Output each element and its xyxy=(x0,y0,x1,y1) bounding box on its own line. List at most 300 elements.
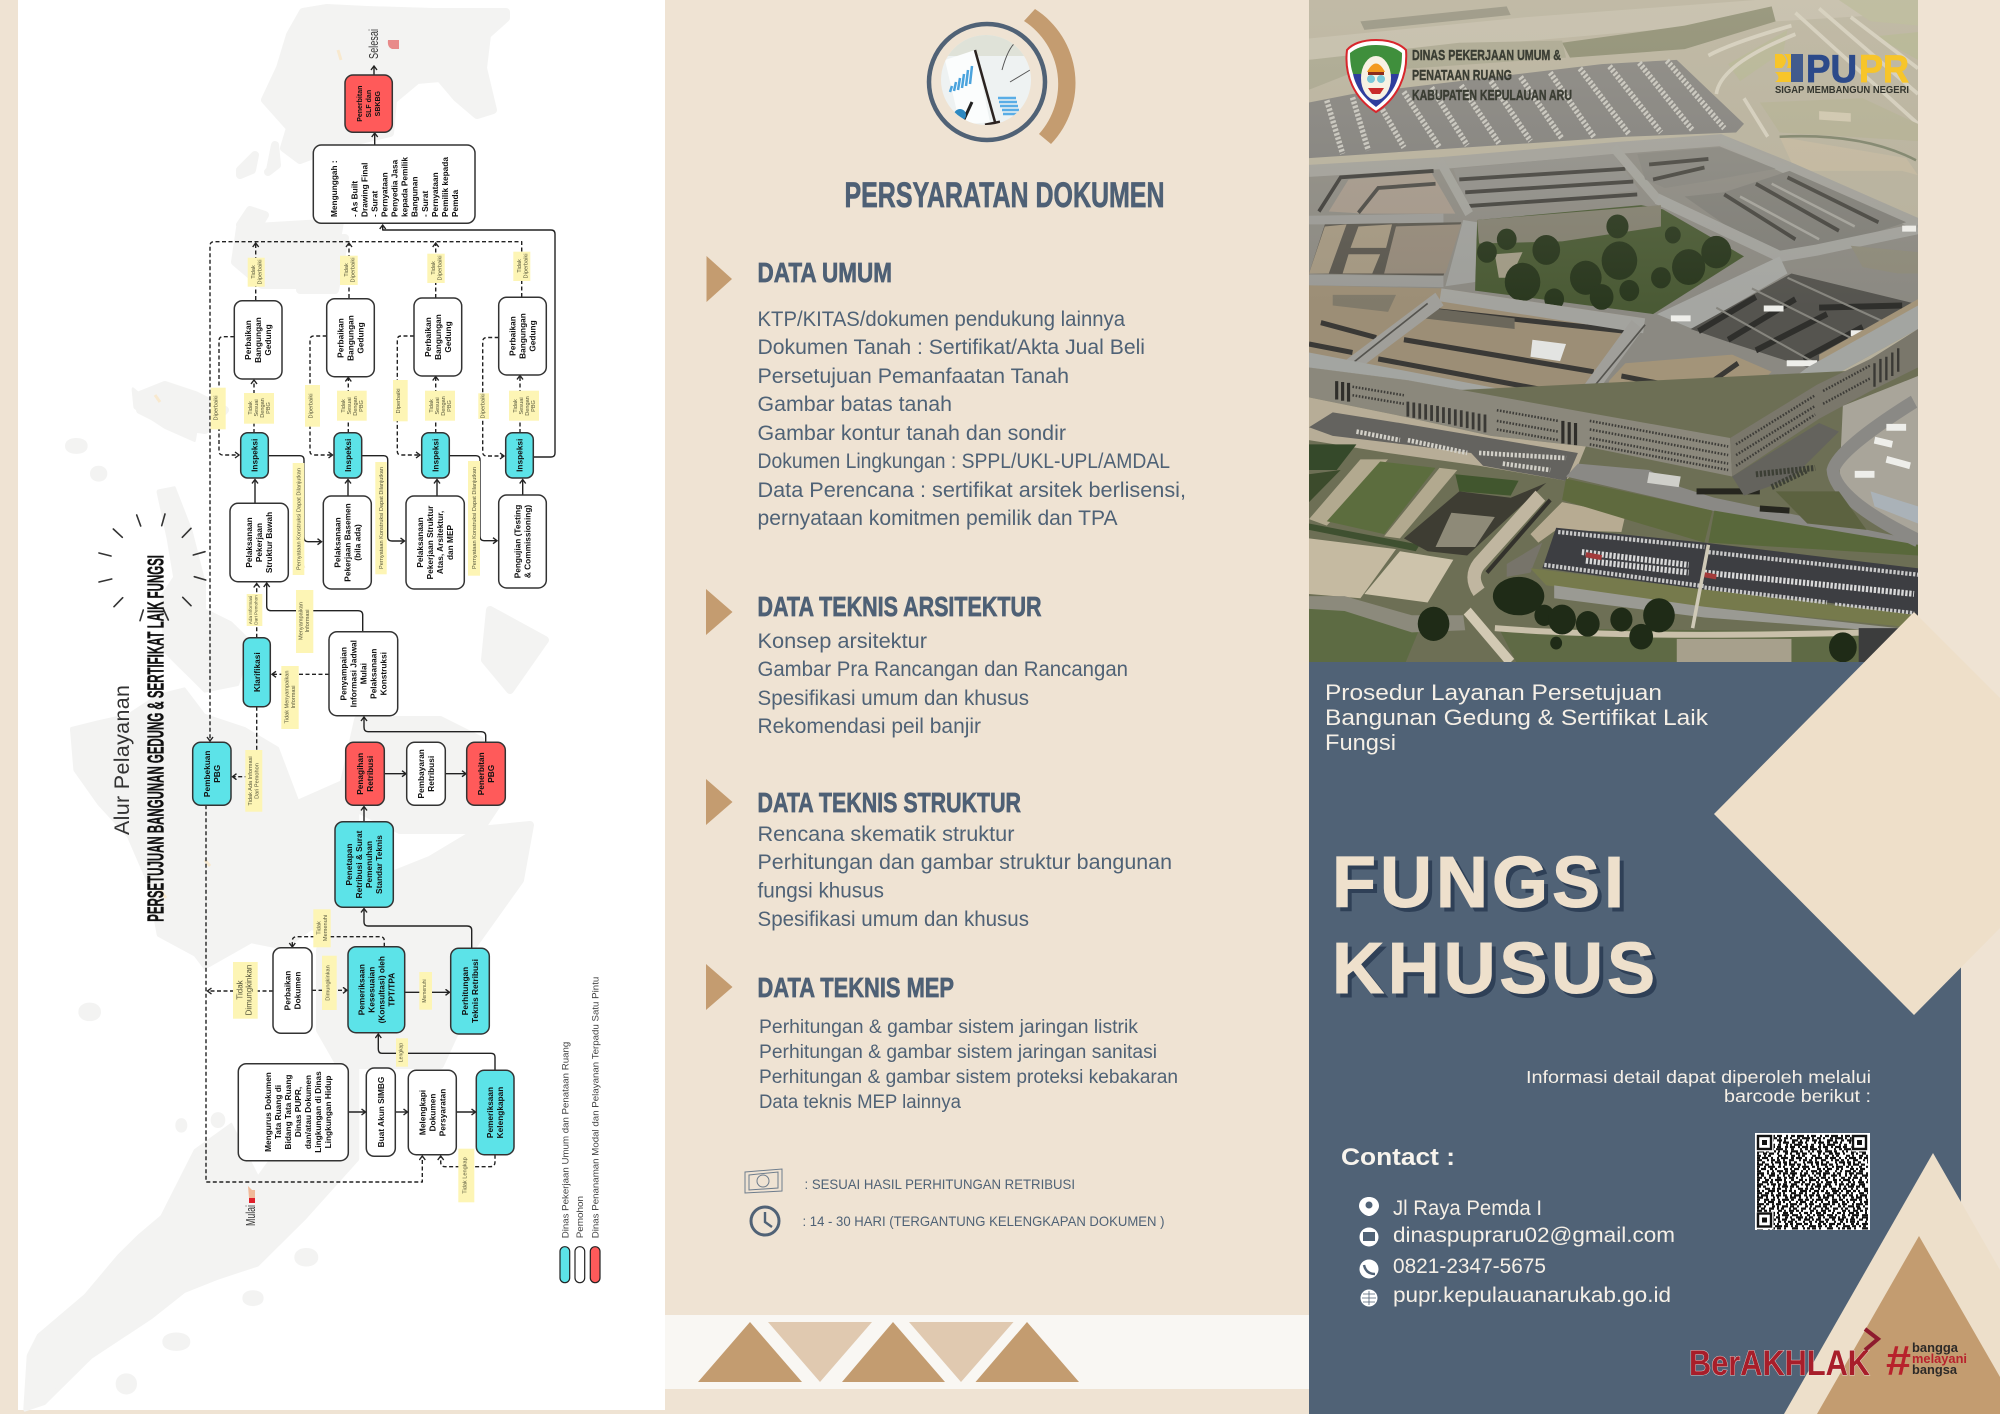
dark grid roof xyxy=(1657,256,1787,329)
box: complete documents: Persyaratan xyxy=(437,1089,447,1136)
yellow decision notes: PBG xyxy=(447,400,453,412)
box: schedule information: Informasi Jadwal xyxy=(348,640,358,707)
box: levy calculation: Perhitungan xyxy=(460,967,470,1015)
section: MEP data xyxy=(706,964,1178,1113)
box: SLF issuance xyxy=(345,75,392,132)
arrow: inspection 1 to repair xyxy=(253,380,255,433)
yellow decision notes: Lengkap xyxy=(398,1043,404,1062)
box: spatial documents xyxy=(238,1064,348,1161)
box: upload list: Drawing Final xyxy=(360,163,370,217)
box: levy decision: Penetapan xyxy=(344,844,354,885)
box: conformity check xyxy=(348,947,405,1033)
box: repair 2: Gedung xyxy=(356,322,366,354)
box: upload list: Mengunggah : xyxy=(329,160,339,217)
yellow decision notes: Informasi xyxy=(305,609,311,633)
box: lower structure work xyxy=(230,503,288,582)
arrow: repair 3 not repaired xyxy=(435,243,437,298)
box: repair 1: Bangungan xyxy=(253,317,263,363)
section list: Rekomendasi peil banjir xyxy=(758,715,981,738)
box: upper structure work: Pekerjaan Struktur xyxy=(425,505,435,579)
section list: Spesifikasi umum dan khusus xyxy=(758,687,1029,710)
arrow: payment to PBG xyxy=(445,773,466,775)
map specks xyxy=(155,50,341,1006)
yellow decision notes: Tidak Menyampaikan xyxy=(284,671,290,723)
box: basement work: (bila ada) xyxy=(352,524,362,561)
box: lower structure work: Struktur Bawah xyxy=(264,512,274,573)
logo: regency crest xyxy=(1346,40,1406,112)
ramp and walkway xyxy=(1474,496,1540,592)
section list xyxy=(758,823,1172,931)
box: levy billing xyxy=(346,742,384,805)
arrow: documents to account xyxy=(348,1111,366,1113)
yellow decision notes: Tidak xyxy=(248,401,254,415)
box: inspection 4: Inspeksi xyxy=(514,439,524,472)
box: testing and commissioning: & Commissioning) xyxy=(522,505,532,578)
label: finish with icon xyxy=(366,29,399,59)
box: levy decision: Pemenuhan xyxy=(364,841,374,888)
front right wing xyxy=(1608,354,1772,382)
box: completeness check: Kelengkapan xyxy=(495,1087,505,1138)
road and grass strips xyxy=(1566,464,1918,553)
box: basement work xyxy=(323,496,371,589)
box: upload list: Pemilik kepada xyxy=(440,157,450,217)
main title: KHUSUS xyxy=(1332,929,1655,1009)
yellow decision notes: Pernyataan Konstruksi Dapat Dilanjutkan xyxy=(472,467,478,569)
decorative triangle band xyxy=(665,1315,1309,1389)
box: inspection 3: Inspeksi xyxy=(430,439,440,472)
main title: KHUSUS xyxy=(1336,933,1659,1013)
section list: pernyataan komitmen pemilik dan TPA xyxy=(758,507,1118,530)
box: inspection 1 xyxy=(241,433,268,478)
box: upload list: - Surat xyxy=(370,190,380,217)
box: upload list: kepada Pemilik xyxy=(400,157,410,217)
yellow decision notes: Tidak xyxy=(513,399,519,413)
decorative diamond xyxy=(1714,612,2000,1015)
box: PBG freeze: PBG xyxy=(212,765,222,783)
blue cover block xyxy=(1309,662,1961,1414)
box: lower structure work: Pekerjaan xyxy=(254,523,264,562)
box: SIMBG account: Buat Akun SIMBG xyxy=(376,1077,386,1147)
section heading: DATA TEKNIS STRUKTUR xyxy=(758,787,1021,818)
arrow marker xyxy=(706,779,732,825)
arrow: account to documents xyxy=(395,1111,408,1113)
yellow decision notes: Sesuai xyxy=(519,397,525,415)
subtitle: Fungsi xyxy=(1325,730,1396,755)
box: repair 2: Perbaikan xyxy=(336,318,346,358)
box: SLF issuance: SLF dan xyxy=(366,90,373,118)
lawns left xyxy=(1309,444,1356,470)
bottom right triangles xyxy=(1784,1153,2000,1414)
icon: web xyxy=(1360,1290,1378,1306)
section list: Dokumen Tanah : Sertifikat/Akta Jual Beli xyxy=(758,336,1145,359)
box: repair 3: Gedung xyxy=(443,321,453,353)
logo: BerAKHLAK xyxy=(1689,1329,1878,1383)
logo: PUPR: PR xyxy=(1859,48,1909,91)
arrow: billing to payment xyxy=(384,773,406,775)
box: PBG issuance: Penerbitan xyxy=(476,752,486,795)
heading: Alur Pelayanan: Alur Pelayanan xyxy=(110,685,134,835)
icon: location xyxy=(1359,1197,1379,1216)
label: finish with icon: Selesai xyxy=(366,29,381,59)
box: basement work: Pekerjaan Basemen xyxy=(342,503,352,582)
box: levy decision xyxy=(335,822,393,907)
section list: Gambar kontur tanah dan sondir xyxy=(758,422,1066,445)
building roof base xyxy=(1309,146,1918,383)
arrow: schedule to work xyxy=(267,583,363,632)
arrow: to finish xyxy=(373,66,375,75)
box: clarification: Klarifikasi xyxy=(252,652,262,692)
box: document repair xyxy=(273,948,312,1033)
yellow decision notes: Diperbaiki xyxy=(524,254,530,278)
box: repair 4: Gedung xyxy=(528,320,538,352)
section list: fungsi khusus xyxy=(758,880,884,902)
arrow: repair 1 not repaired xyxy=(255,243,257,300)
label: start with icon: Mulai xyxy=(243,1205,258,1226)
box: completeness check xyxy=(476,1070,514,1155)
section list: Perhitungan dan gambar struktur bangunan xyxy=(758,851,1172,874)
box: inspection 2 xyxy=(334,433,362,478)
section: structure data xyxy=(706,779,1172,931)
arrow: decision to billing xyxy=(363,806,365,822)
section list: Dokumen Lingkungan : SPPL/UKL-UPL/AMDAL xyxy=(758,450,1170,473)
box: inspection 2: Inspeksi xyxy=(343,439,353,472)
box: spatial documents: Mengurus Dokumen xyxy=(263,1072,273,1152)
arrow: last inspection to upload xyxy=(383,225,555,457)
barcode info: Informasi detail dapat diperoleh melalui xyxy=(1526,1067,1871,1087)
arrow: inspection 3 to testing xyxy=(449,456,497,541)
yellow decision notes: Sesuai xyxy=(435,397,441,415)
main title: FUNGSI xyxy=(1332,843,1624,923)
box: levy decision: Standar Teknis xyxy=(374,835,384,894)
front roof band xyxy=(1309,306,1918,390)
address: Jl Raya Pemda I xyxy=(1393,1197,1542,1220)
box: levy payment: Retribusi xyxy=(426,756,436,792)
box: repair 3: Perbaikan xyxy=(423,317,433,357)
box: levy calculation xyxy=(451,948,489,1034)
box: repair 2 xyxy=(327,299,374,377)
box: repair 1: Perbaikan xyxy=(243,320,253,360)
agency name: KABUPATEN KEPULAUAN ARU xyxy=(1412,88,1572,104)
arrow: work 3 to inspection xyxy=(436,480,438,496)
box: upload list xyxy=(313,145,475,223)
box: completeness check: Pemeriksaan xyxy=(485,1087,495,1138)
box: levy calculation: Teknis Retribusi xyxy=(470,959,480,1023)
box: upper structure work: Pelaksanaan xyxy=(415,517,425,568)
section list xyxy=(759,1017,1178,1113)
pit and hedge xyxy=(1404,483,1546,555)
arrow: testing to inspection xyxy=(522,480,524,495)
white sheet xyxy=(18,0,665,1410)
box: spatial documents: dan/atau Dokumen xyxy=(303,1075,313,1149)
box: PBG freeze xyxy=(193,742,231,805)
box: complete documents: Melengkapi xyxy=(417,1090,427,1135)
yellow decision notes: Tidak xyxy=(341,399,347,413)
yellow decision notes: Informasi xyxy=(291,685,297,709)
box: clarification xyxy=(243,638,270,707)
subtitle: Bangunan Gedung & Sertifikat Laik xyxy=(1325,705,1709,730)
courtyard xyxy=(1475,205,1744,314)
box: inspection 4 xyxy=(506,433,533,478)
section heading: DATA UMUM xyxy=(758,257,892,288)
back left wing xyxy=(1329,173,1455,214)
logo: PUPR xyxy=(1775,48,1909,96)
section list: Konsep arsitektur xyxy=(758,630,927,653)
arrow: repaired 4 xyxy=(483,338,504,456)
yellow decision notes: Diperbaiki xyxy=(438,256,444,280)
yellow decision notes: Sesuai xyxy=(347,397,353,415)
box: PBG issuance xyxy=(467,742,505,805)
box: levy billing: Penagihan xyxy=(355,753,365,795)
yellow decision notes: Diperbaiki xyxy=(258,260,264,284)
contact list xyxy=(1359,1197,1675,1307)
box: upload list: Bangunan xyxy=(410,176,420,217)
arrow: documents to check xyxy=(456,1111,476,1113)
arrow: calculation to decision xyxy=(364,908,472,948)
box: schedule information xyxy=(329,632,398,716)
yellow decision notes: Dengan xyxy=(441,396,447,416)
upper surroundings xyxy=(1309,0,1918,384)
box: SLF issuance: SBKBG xyxy=(375,91,382,116)
box: complete documents: Dokumen xyxy=(427,1094,437,1131)
arrow: work 2 to inspection xyxy=(347,480,349,496)
section: architecture data xyxy=(706,589,1128,738)
box: repair 2: Bangungan xyxy=(346,315,356,361)
yellow decision notes: Dari Pemohon xyxy=(254,763,260,799)
yellow decision notes: Pernyataan Konstruksi Dapat Dilanjutkan xyxy=(379,467,385,569)
section list: Perhitungan & gambar sistem jaringan listrik xyxy=(759,1017,1138,1038)
box: repair 4 xyxy=(499,297,546,375)
yellow decision notes: Dengan xyxy=(353,396,359,416)
yellow decision notes: Diperbaiki xyxy=(214,396,220,420)
logo: bangga melayani bangsa: bangga xyxy=(1912,1340,1959,1355)
arrow: upload to SLF issuance xyxy=(374,133,376,145)
arrow: schedule to clarification xyxy=(272,673,329,675)
box: upper structure work xyxy=(406,496,464,589)
arrow: inspection 1 to basement work xyxy=(268,456,322,542)
arrow: not compliant xyxy=(292,937,384,947)
QR code xyxy=(1755,1133,1870,1230)
legend: Dinas Pekerjaan Umum dan Penataan Ruang xyxy=(560,1042,570,1238)
phone: 0821-2347-5675 xyxy=(1393,1255,1546,1278)
yellow decision notes: Tidak xyxy=(251,265,257,279)
section list: Perhitungan & gambar sistem jaringan sanitasi xyxy=(759,1042,1157,1063)
box: PBG issuance: PBG xyxy=(486,765,496,783)
yellow decision notes: Tidak xyxy=(429,399,435,413)
arrow: compliant xyxy=(405,991,450,993)
box: PBG freeze: Pembekuan xyxy=(202,751,212,797)
dark parking lot xyxy=(1542,528,1918,615)
yellow decision notes: Dengan xyxy=(525,396,531,416)
box: conformity check: TPT/TPA xyxy=(386,973,396,1007)
panel: service flow: PERSETUJUAN BANGUNAN GEDUNG & SERTIFIKAT LAIK FUNGSI xyxy=(142,555,168,922)
arrow: inspection 4 to repair xyxy=(519,376,521,433)
section: general data xyxy=(706,256,1186,530)
yellow decision notes: Tidak xyxy=(344,263,350,277)
box: repair 3 xyxy=(414,298,462,376)
cost note: : SESUAI HASIL PERHITUNGAN RETRIBUSI xyxy=(804,1176,1075,1192)
main title: FUNGSI xyxy=(1336,847,1628,927)
lower ground base xyxy=(1309,367,1918,667)
box: upload list: Pemda xyxy=(450,189,460,217)
yellow decision notes: PBG xyxy=(266,402,272,414)
arrow: inspection 2 to repair xyxy=(347,378,349,433)
yellow decision notes: PBG xyxy=(359,400,365,412)
agency name xyxy=(1412,48,1572,104)
back right wing xyxy=(1644,164,1776,180)
box: repair 1: Gedung xyxy=(263,324,273,356)
box: complete documents xyxy=(408,1070,456,1155)
box: upper structure work: Atas, Arsitektur, xyxy=(435,511,445,574)
logo: PUPR: SIGAP MEMBANGUN NEGERI xyxy=(1775,84,1909,96)
icon: banknote xyxy=(745,1169,782,1193)
box: schedule information: Konstruksi xyxy=(378,652,388,695)
icon: service flow sunburst rays xyxy=(99,514,206,621)
arrow: PBG to schedule xyxy=(364,717,486,742)
section list: Rencana skematik struktur xyxy=(758,823,1014,846)
box: repair 4: Perbaikan xyxy=(508,316,518,356)
box: repair 4: Bangungan xyxy=(518,313,528,359)
yellow decision notes: Dimungkinkan xyxy=(326,965,332,1001)
logo: bangga melayani bangsa: # xyxy=(1886,1337,1911,1384)
map of islands background xyxy=(25,8,545,1409)
box: document repair: Dokumen xyxy=(292,972,302,1009)
flow connectors xyxy=(206,66,555,1182)
grass and road below parking xyxy=(1530,568,1918,628)
arrow: work 1 to inspection xyxy=(254,480,256,503)
arrow: possible xyxy=(312,989,347,991)
box: schedule information: Mulai xyxy=(358,663,368,684)
yellow decision notes: Diperbaiki xyxy=(480,394,486,418)
icon: clock xyxy=(751,1207,779,1235)
box: testing and commissioning: Pengujian (Testing xyxy=(512,505,522,578)
contact heading: Contact : xyxy=(1341,1144,1455,1171)
box: levy payment xyxy=(407,742,445,805)
duration note: : 14 - 30 HARI (TERGANTUNG KELENGKAPAN DOKUMEN ) xyxy=(802,1213,1164,1229)
sand plazas xyxy=(1309,538,1396,598)
yellow decision notes: Memenuhi xyxy=(422,979,428,1003)
arrow: clarification to freeze xyxy=(232,707,257,777)
legend: Pemohon xyxy=(575,1196,585,1238)
box: upload list: Pernyataan xyxy=(430,172,440,217)
barcode info xyxy=(1526,1067,1871,1106)
section list xyxy=(758,630,1128,738)
front pavement and lot xyxy=(1309,397,1586,481)
subtitle: Prosedur Layanan Persetujuan xyxy=(1325,680,1662,705)
barcode info: barcode berikut : xyxy=(1724,1086,1871,1106)
yellow decision notes: Memenuhi xyxy=(323,915,329,941)
box: inspection 3 xyxy=(422,433,449,478)
box: upper structure work: dan MEP xyxy=(445,525,455,560)
heading: document requirements: PERSYARATAN DOKUMEN xyxy=(844,176,1164,215)
section list: Gambar batas tanah xyxy=(758,393,952,416)
arrow: repair 2 not repaired xyxy=(348,243,350,298)
subtitle xyxy=(1325,680,1709,755)
box: repair 1 xyxy=(234,301,282,379)
yellow decision notes: Diperbaiki xyxy=(350,258,356,282)
yellow decision notes: Dari Pemohon xyxy=(254,595,258,625)
box: spatial documents: Bidang Tata Ruang xyxy=(283,1075,293,1149)
agency name: DINAS PEKERJAAN UMUM & xyxy=(1412,48,1561,64)
arrow marker xyxy=(706,256,732,302)
panel: cover xyxy=(1309,0,2000,1414)
box: conformity check: Pemeriksaan xyxy=(356,964,366,1015)
section heading: DATA TEKNIS MEP xyxy=(758,972,954,1003)
yellow decision notes: Tidak xyxy=(316,921,322,935)
section list: Data teknis MEP lainnya xyxy=(759,1092,961,1113)
back wing strips xyxy=(1588,154,1613,156)
legend xyxy=(560,977,601,1283)
logo: bangga melayani bangsa xyxy=(1886,1337,1967,1384)
logo: bangga melayani bangsa: bangsa xyxy=(1912,1362,1958,1377)
box: repair 3: Bangungan xyxy=(433,314,443,360)
yellow decision notes: PBG xyxy=(531,400,537,412)
yellow decision notes: Tidak Ada Informasi xyxy=(248,756,254,806)
logo: bangga melayani bangsa: melayani xyxy=(1912,1351,1967,1366)
facade xyxy=(1309,367,1732,476)
logo: BerAKHLAK: BerAKHLAK xyxy=(1689,1344,1870,1383)
box: testing and commissioning xyxy=(499,495,546,588)
front left wing xyxy=(1309,286,1622,388)
yellow decision notes: Diperbaiki xyxy=(308,394,314,418)
icon: phone xyxy=(1360,1260,1378,1278)
box: spatial documents: Lingkungan Hidup xyxy=(323,1076,333,1148)
yellow decision notes: Pernyataan Konstruksi Dapat Dilanjutkan xyxy=(296,468,302,570)
yellow decision notes: Dimungkinkan xyxy=(244,965,254,1015)
upper wash xyxy=(1309,0,1918,248)
yellow decision notes: Diperbaiki xyxy=(396,389,402,413)
right yard xyxy=(1732,423,1839,496)
section list: Spesifikasi umum dan khusus xyxy=(758,908,1029,931)
yellow decision notes xyxy=(211,252,539,1202)
yellow decision notes: Sesuai xyxy=(254,399,260,417)
section list: KTP/KITAS/dokumen pendukung lainnya xyxy=(758,308,1125,331)
box: upload list: Penyedia Jasa xyxy=(390,159,400,217)
arrow: inspection 2 to upper structure xyxy=(362,456,404,541)
box: schedule information: Penyampaian xyxy=(338,647,348,700)
arrow: not repaired return line xyxy=(210,242,522,741)
arrow: clarification to work xyxy=(256,584,258,638)
icon: documents in ring xyxy=(929,9,1075,144)
box: upload list: - Surat xyxy=(420,190,430,217)
yellow decision notes: Tidak xyxy=(517,259,523,273)
email: dinaspupraru02@gmail.com xyxy=(1393,1224,1675,1247)
box: SIMBG account xyxy=(366,1068,395,1156)
panel: service flow xyxy=(18,0,665,1410)
box: upload list: - As Built xyxy=(350,181,360,217)
section list: Gambar Pra Rancangan dan Rancangan xyxy=(758,658,1128,681)
arrow: incomplete xyxy=(441,1155,495,1167)
arrow: not possible xyxy=(208,990,273,992)
box: inspection 1: Inspeksi xyxy=(250,439,260,472)
box: levy billing: Retribusi xyxy=(365,756,375,792)
box: spatial documents: Lingkungan di Dinas xyxy=(313,1071,323,1153)
yellow decision notes: Dengan xyxy=(260,398,266,418)
main title xyxy=(1332,843,1659,1013)
section list: Data Perencana : sertifikat arsitek berlisensi, xyxy=(758,479,1186,502)
yellow decision notes: Tidak xyxy=(431,261,437,275)
arrow: inspection 3 to repair xyxy=(435,376,437,433)
section list: Persetujuan Pemanfaatan Tanah xyxy=(758,365,1069,388)
arrow marker xyxy=(706,589,732,635)
bottom ground xyxy=(1309,609,1418,662)
website: pupr.kepulauanarukab.go.id xyxy=(1393,1284,1671,1307)
panel: document requirements xyxy=(665,9,1309,1389)
parking lot top xyxy=(1309,60,1744,158)
photo: aerial view of building xyxy=(1309,0,1918,667)
box: levy payment: Pembayaran xyxy=(416,749,426,798)
box: spatial documents: Dinas PUPR, xyxy=(293,1087,303,1137)
box: conformity check: (Konsultasi) oleh xyxy=(376,956,386,1023)
